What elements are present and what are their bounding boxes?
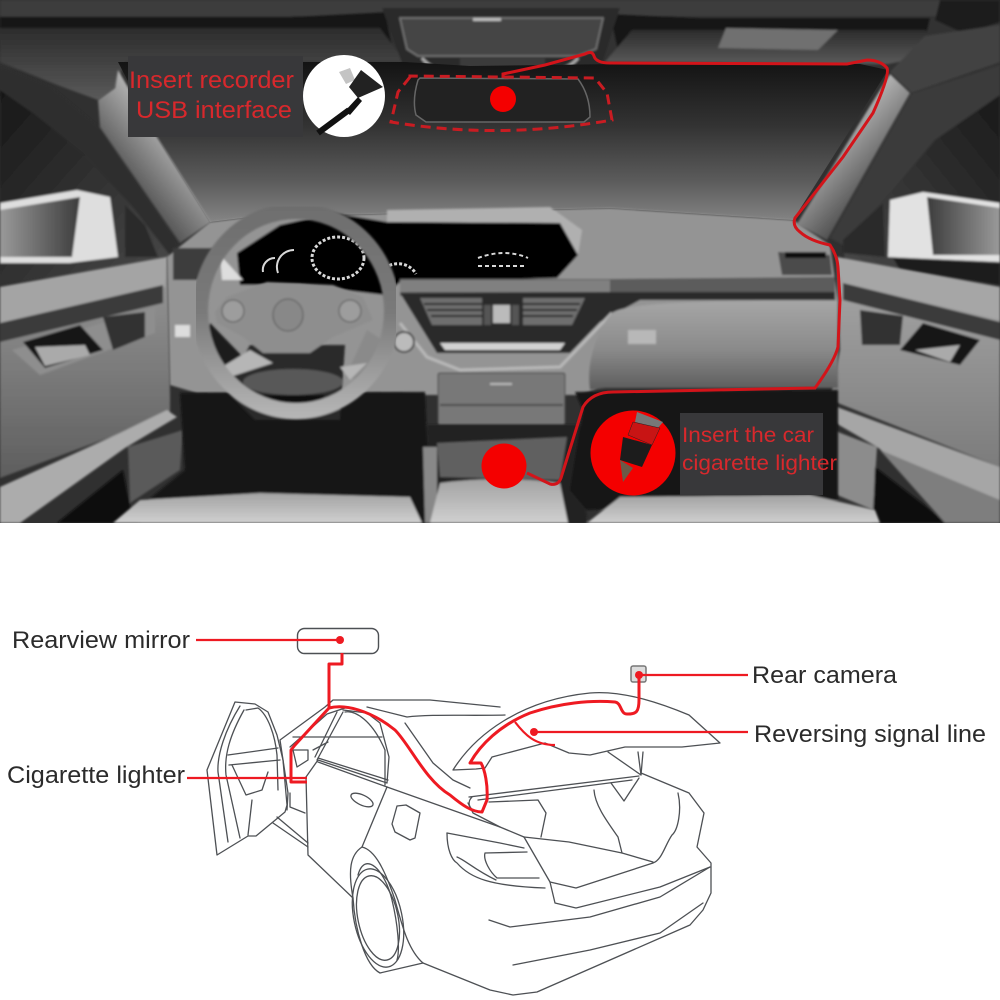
- callout: insert recorder USB interface: USB interface: [136, 97, 292, 124]
- diagram: car line drawing: [207, 693, 720, 995]
- instrument dials: [263, 237, 528, 279]
- windscreen: [118, 62, 888, 222]
- front wheel and arch: [344, 847, 423, 973]
- callout: insert the car cigarette lighter: cigarette lighter: [682, 451, 837, 475]
- leader: rearview mirror: [196, 636, 344, 644]
- callout: insert recorder USB interface: [128, 56, 303, 137]
- icon: USB cable: [303, 55, 385, 137]
- front door: [306, 777, 353, 898]
- open rear door: [207, 702, 287, 855]
- label: rear camera: Rear camera: [752, 662, 898, 689]
- leader: cigarette lighter: [187, 777, 307, 779]
- side mirrors: [0, 190, 118, 263]
- photo: car interior: [0, 0, 1000, 523]
- right door: [830, 257, 1000, 467]
- rearview mirror in photo: [414, 78, 590, 122]
- door frame and roof: [280, 700, 500, 810]
- trunk lid: [453, 693, 720, 775]
- callout: insert the car cigarette lighter: Insert the car: [682, 423, 814, 447]
- side windows, frames and A-pillars: [0, 65, 1000, 290]
- callout: insert the car cigarette lighter: [680, 413, 837, 495]
- label: rearview mirror: Rearview mirror: [12, 627, 190, 654]
- fuel flap: [392, 805, 420, 840]
- leader: rear camera: [635, 671, 748, 679]
- red wiring route: [503, 52, 887, 484]
- steering wheel: [200, 211, 392, 420]
- icon: cigarette lighter plug: [590, 410, 676, 496]
- floor and centre console: [113, 390, 880, 523]
- label: cigarette lighter: Cigarette lighter: [7, 762, 185, 789]
- red wiring in diagram: [291, 653, 639, 812]
- label: reversing signal line: Reversing signal line: [754, 721, 986, 748]
- dashboard: [167, 207, 838, 425]
- trunk opening: [469, 776, 639, 812]
- leader: reversing signal line: [515, 722, 748, 745]
- red dot: recorder: [490, 86, 516, 112]
- callout: mirror dashed outline: [391, 76, 612, 131]
- left door: [0, 257, 170, 478]
- tail light: [447, 833, 524, 848]
- diagram: rear camera icon: [631, 666, 646, 682]
- callout: insert recorder USB interface: Insert recorder: [129, 67, 294, 94]
- ceiling and sun visors: [0, 0, 1000, 100]
- diagram: mirror icon: [298, 628, 378, 654]
- white lower panel background: [0, 523, 1000, 1000]
- red dot: lighter socket: [482, 444, 526, 488]
- rear windscreen and quarter: [367, 707, 505, 788]
- doors: [0, 257, 1000, 523]
